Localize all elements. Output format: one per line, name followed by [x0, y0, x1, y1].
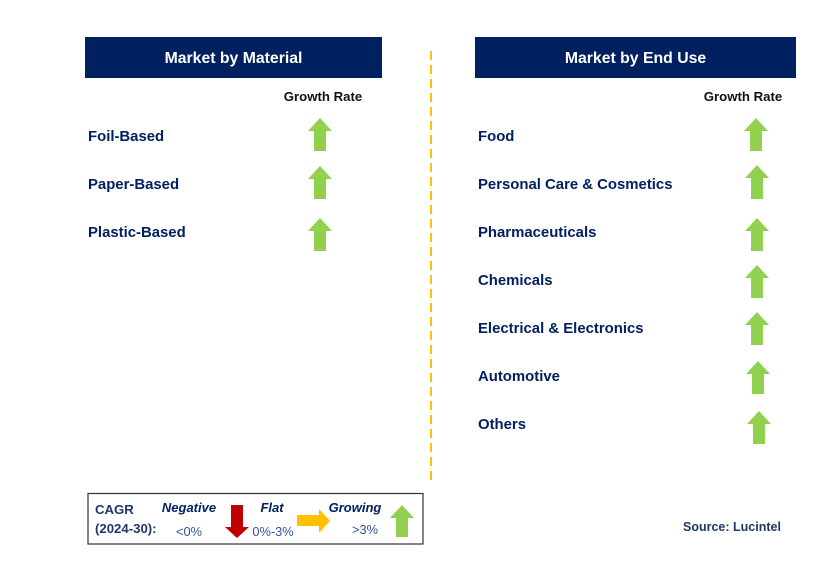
- row: others: [478, 411, 771, 444]
- row: food: Food: [478, 129, 514, 145]
- legend item: negative: <0%: [176, 524, 202, 539]
- row: chemicals: Chemicals: [478, 273, 552, 289]
- row: personal care and cosmetics: [478, 165, 769, 199]
- row: plastic-based: [88, 218, 332, 251]
- row: pharmaceuticals: Pharmaceuticals: [478, 225, 596, 241]
- legend item: flat: 0%-3%: [252, 524, 294, 539]
- panel: market by material: [85, 37, 382, 251]
- legend item: growing: [329, 500, 414, 537]
- source credit: Source: Lucintel: [683, 520, 781, 534]
- row: paper-based: [88, 166, 332, 199]
- row: food: [478, 118, 768, 151]
- row: electrical and electronics: Electrical & Electronics: [478, 321, 644, 337]
- row: pharmaceuticals: [478, 218, 769, 251]
- row: personal care and cosmetics: Personal Care & Cosmetics: [478, 177, 672, 193]
- legend item: flat: Flat: [260, 500, 284, 515]
- heading: market by material: Market by Material: [165, 50, 302, 67]
- legend item: negative: [162, 500, 249, 539]
- legend: CAGR key: [88, 494, 423, 544]
- row: others: Others: [478, 417, 526, 433]
- legend item: growing: Growing: [329, 500, 381, 515]
- growth rate column label: end use: Growth Rate: [704, 89, 782, 104]
- panel: market by end use: [475, 37, 796, 444]
- row: chemicals: [478, 265, 769, 298]
- growth rate column label: material: Growth Rate: [284, 89, 362, 104]
- heading: market by end use: Market by End Use: [565, 50, 706, 67]
- legend label: CAGR period: CAGR: [95, 502, 134, 517]
- row: electrical and electronics: [478, 312, 769, 345]
- heading: market by end use: [475, 37, 796, 78]
- row: foil-based: Foil-Based: [88, 129, 164, 145]
- legend label: CAGR period: [95, 502, 157, 536]
- row: plastic-based: Plastic-Based: [88, 225, 186, 241]
- legend item: flat: [252, 500, 330, 539]
- row: paper-based: Paper-Based: [88, 177, 179, 193]
- heading: market by material: [85, 37, 382, 78]
- legend label: CAGR period: (2024-30):: [95, 521, 157, 536]
- center dashed divider: [430, 51, 432, 480]
- legend item: growing: >3%: [352, 522, 378, 537]
- row: foil-based: [88, 118, 332, 151]
- row: automotive: Automotive: [478, 369, 560, 385]
- row: automotive: [478, 361, 770, 394]
- legend item: negative: Negative: [162, 500, 216, 515]
